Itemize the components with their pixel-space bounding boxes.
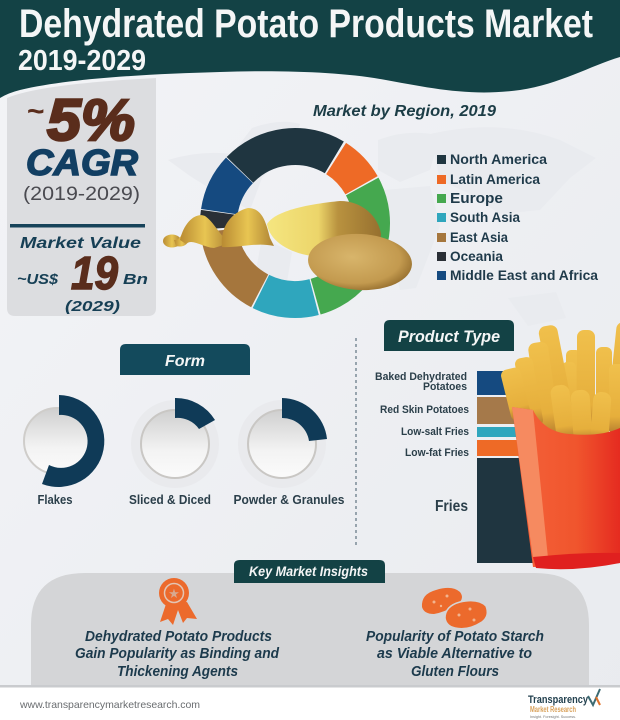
label: powder and granules: Powder & Granules: [234, 492, 344, 507]
market value year: (2029): [65, 298, 120, 315]
bar chart: product type: [375, 371, 547, 563]
bar labels: Fries: [435, 498, 468, 515]
legend: regions: [437, 151, 598, 283]
insight: binding and thickening: Gain Popularity as Binding and: [75, 646, 280, 662]
divider: [10, 224, 145, 228]
market value currency: ~US$: [17, 271, 59, 288]
heading: product type: Product Type: [398, 327, 500, 346]
panel: CAGR and market value: [7, 78, 156, 316]
insight: potato starch: Gluten Flours: [411, 664, 499, 680]
icon: whole potato: [307, 231, 413, 293]
CAGR label: CAGR: [26, 142, 138, 183]
market value number: 19: [71, 247, 118, 299]
insight: potato starch: [366, 629, 544, 680]
legend: regions: East Asia: [450, 229, 508, 245]
website url: www.transparencymarketresearch.com: [19, 699, 200, 711]
footer: [0, 685, 620, 720]
logo: transparency market research: Market Research: [530, 705, 576, 714]
legend: regions: South Asia: [450, 209, 520, 225]
bar labels: Low-fat Fries: [405, 447, 469, 459]
icon: potato slices: [422, 588, 487, 629]
bar labels: Red Skin Potatoes: [380, 404, 469, 416]
icon: peeled potato: [267, 201, 381, 257]
market value unit: Bn: [123, 271, 148, 288]
heading: form: [120, 344, 250, 375]
icon: fries box: [500, 321, 620, 569]
heading: key market insights: [234, 560, 385, 583]
heading: form: Form: [165, 353, 205, 370]
icon: medal: [159, 578, 197, 625]
legend: regions: Middle East and Africa: [450, 267, 598, 283]
legend: regions: Latin America: [450, 171, 540, 187]
heading: market by region: Market by Region, 2019: [313, 103, 496, 120]
logo: transparency market research: Transparency: [528, 694, 589, 706]
legend: regions: Oceania: [450, 248, 503, 264]
legend: regions: North America: [450, 151, 547, 167]
bar labels: Low-salt Fries: [401, 426, 469, 438]
CAGR tilde: ~: [27, 95, 45, 128]
insight: potato starch: Popularity of Potato Starch: [366, 629, 544, 645]
heading: key market insights: Key Market Insights: [249, 564, 368, 579]
label: sliced and diced: Sliced & Diced: [129, 492, 211, 507]
fries: [500, 321, 620, 443]
legend: regions: Europe: [450, 190, 503, 207]
CAGR period: (2019-2029): [23, 184, 140, 205]
bar labels: Baked Dehydrated: [375, 371, 467, 383]
bar labels: Potatoes: [423, 381, 467, 393]
insight: binding and thickening: Thickening Agents: [117, 664, 238, 680]
ring chart: sliced and diced: [129, 398, 219, 507]
heading: product type: [384, 320, 514, 351]
panel: key market insights: [31, 560, 589, 685]
bar labels: [375, 371, 469, 515]
insight: binding and thickening: [75, 629, 280, 680]
insight: potato starch: as Viable Alternative to: [377, 646, 532, 662]
ring chart: flakes: [24, 395, 104, 507]
title years: 2019-2029: [18, 45, 146, 77]
ring chart: powder and granules: [234, 398, 344, 507]
world map backdrop: [168, 122, 596, 326]
icon: potato peel: [163, 208, 274, 248]
logo: transparency market research: Insight. Foresight. Success.: [530, 715, 576, 719]
donut chart: market by region: [187, 115, 403, 331]
logo: transparency market research: [528, 689, 600, 719]
CAGR percentage: 5%: [47, 88, 135, 153]
header banner: [0, 0, 620, 98]
market value label: Market Value: [20, 235, 141, 252]
label: flakes: Flakes: [38, 492, 72, 507]
icon: medal: ★: [168, 586, 180, 601]
insight: binding and thickening: Dehydrated Potato Products: [85, 629, 272, 645]
fries carton: [512, 407, 620, 567]
